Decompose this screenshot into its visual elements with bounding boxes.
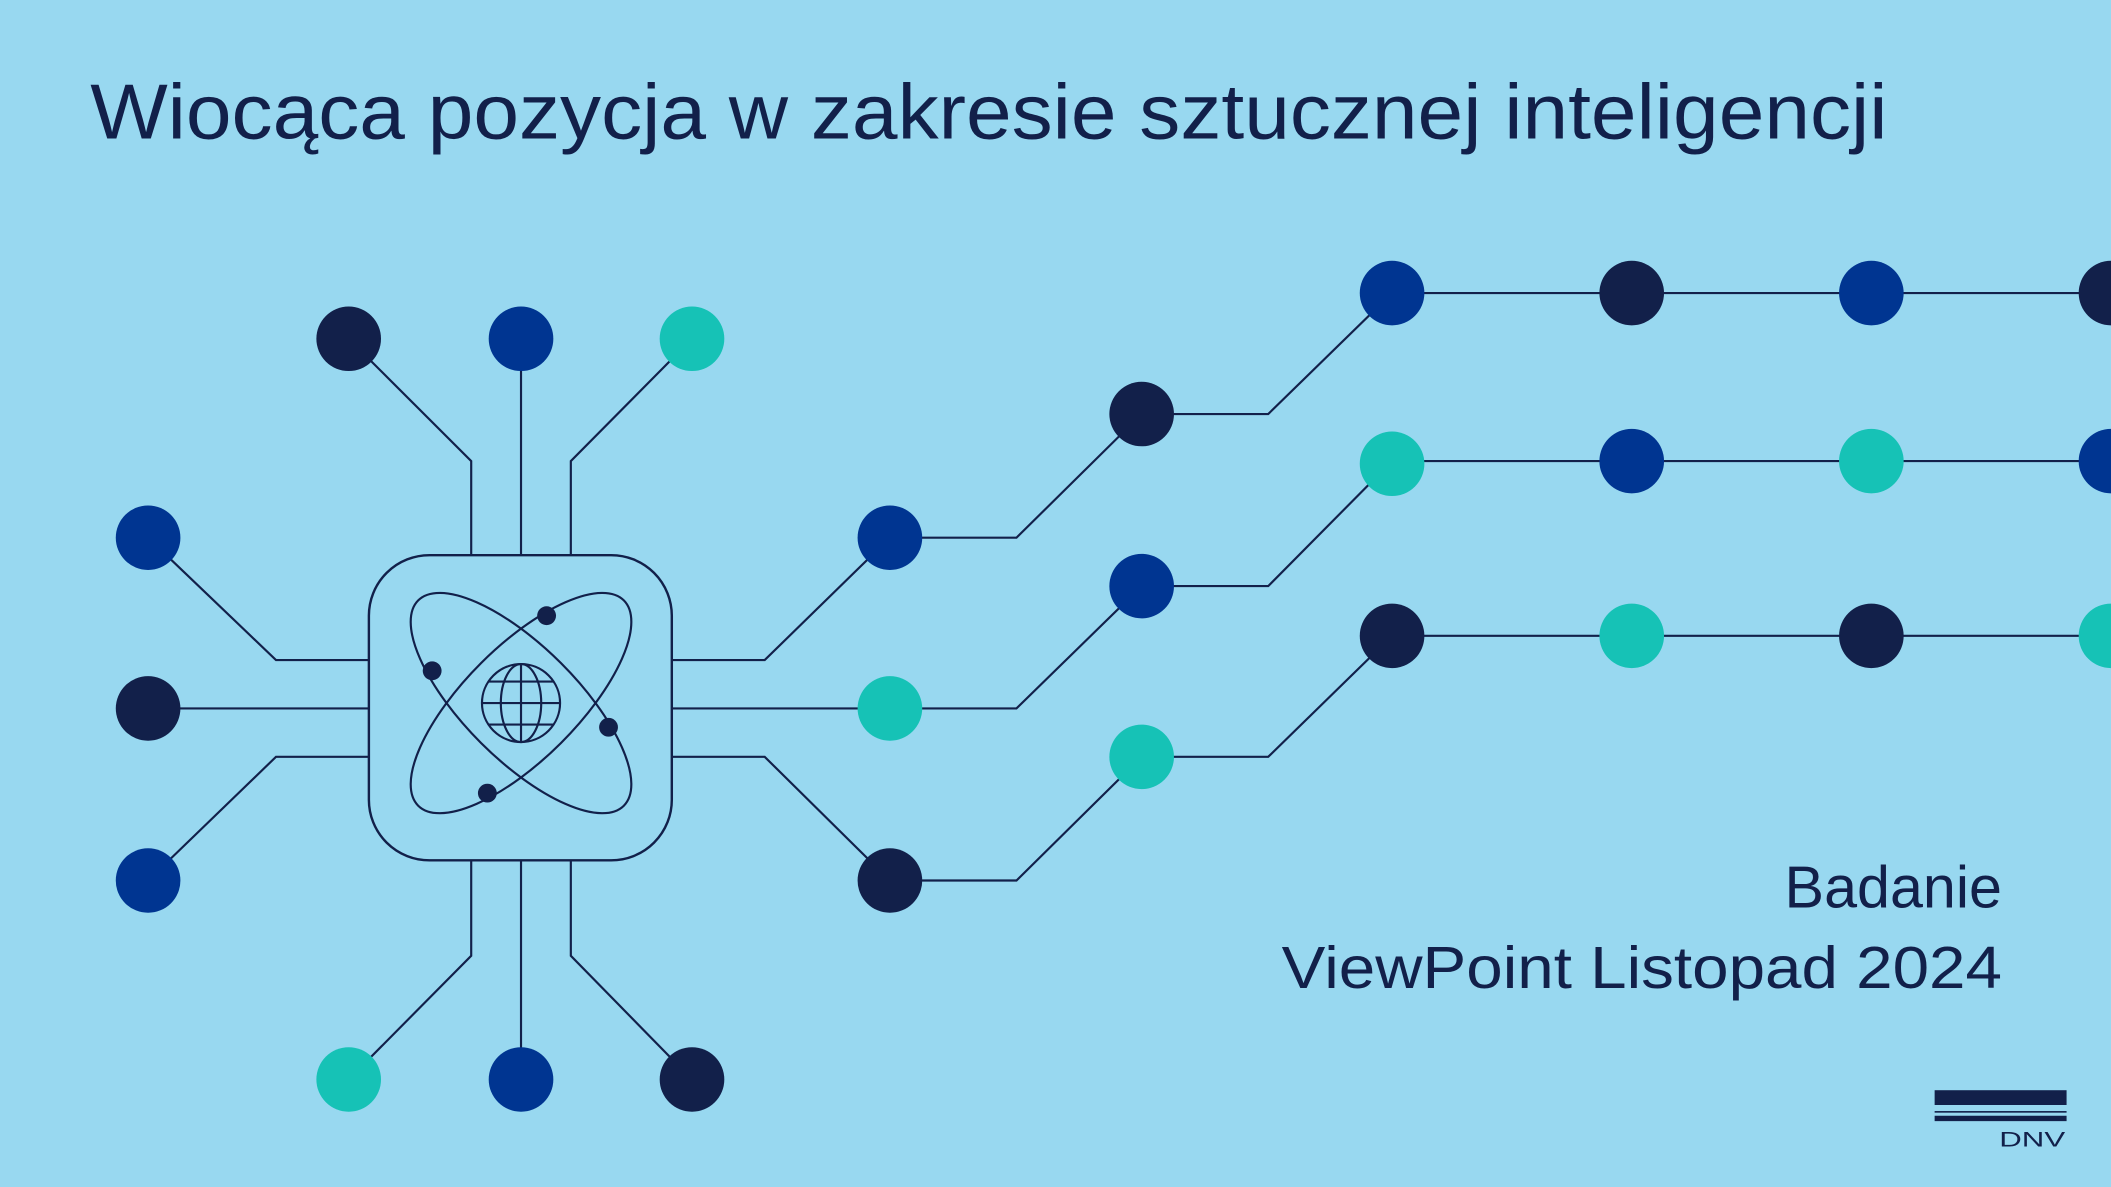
subtitle — [1282, 853, 2002, 1001]
title: Wiocąca pozycja w zakresie sztucznej inteligencji — [90, 68, 1888, 155]
circuit lines — [148, 293, 2111, 1079]
chip with atom icon — [369, 555, 672, 860]
nodes — [116, 261, 2111, 1112]
subtitle: ViewPoint Listopad 2024 — [1282, 934, 2002, 1001]
subtitle: Badanie — [1785, 853, 2002, 920]
DNV logo: DNV — [1999, 1128, 2066, 1152]
DNV logo — [1935, 1090, 2067, 1152]
